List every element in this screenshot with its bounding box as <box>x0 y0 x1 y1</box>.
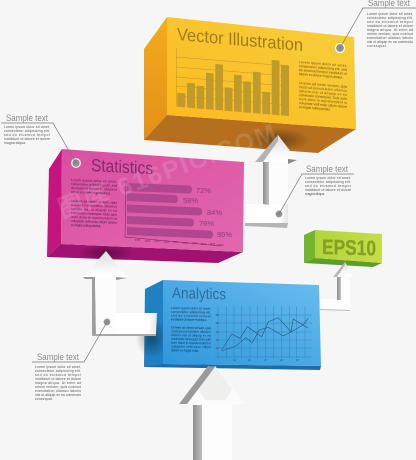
bar chart: horizontal percentages: 90% <box>210 242 216 246</box>
text block: blue box: commodo consequat. Duis aute <box>171 337 211 342</box>
callout: middle right sample text: Lorem ipsum dolor sit amet, <box>305 176 351 180</box>
callout: left sample text: Sample text <box>6 113 48 123</box>
line chart: blue box: 10 <box>216 346 219 350</box>
line chart: blue box: 40 <box>216 321 219 325</box>
bar chart: horizontal percentages: 80% <box>201 242 207 246</box>
callout: top right sample text: consectetur adipisicing elit, <box>367 16 413 20</box>
callout: top right sample text: incididunt ut labore et dolore <box>367 24 413 28</box>
text block: orange box: irure dolor in reprehenderit in <box>299 97 347 105</box>
text block: orange box: Ut enim ad minim veniam, quis <box>299 81 347 89</box>
heading: Statistics: Statistics <box>91 155 153 178</box>
text block: blue box: incididunt ut labore et dolore. <box>171 317 207 322</box>
text block: orange box: nostrud exercitation ullamco <box>299 85 347 93</box>
line chart: blue box: 40 <box>280 358 283 362</box>
callout: lower left sample text: sed do eiusmod tempor <box>35 373 82 377</box>
text block: blue box: Ut enim ad minim veniam, quis <box>171 326 211 330</box>
panel: green box EPS10 <box>304 230 382 267</box>
panel: orange box Vector Illustration <box>144 17 356 153</box>
panel: pink box Statistics <box>47 149 244 263</box>
line chart: blue box <box>215 306 312 362</box>
bar chart: horizontal percentages: 70% <box>192 241 198 245</box>
callout: lower left sample text: consequat. <box>35 397 53 401</box>
text block: pink box: consectetur adipisicing elit, sed <box>71 182 117 188</box>
bar chart: horizontal percentages: 40% <box>164 240 170 244</box>
callout: top right sample text: minim veniam, quis nostrud <box>367 32 413 36</box>
bar chart: orange <box>176 48 289 116</box>
callout: left sample text: sed do eiusmod tempor <box>4 133 51 137</box>
text block: orange box: eu fugiat nulla pariatur. <box>299 105 331 112</box>
callout: middle right sample text: incididunt ut labore et dolore <box>305 188 351 192</box>
bar chart: horizontal percentages: 95% <box>217 230 232 239</box>
text block: orange box: do eiusmod tempor incididunt ut <box>299 68 347 76</box>
callout: left sample text: incididunt ut labore et dolore <box>4 137 50 141</box>
text block: blue box: nostrud exercitation ullamco <box>171 329 211 334</box>
bar chart: horizontal percentages <box>125 180 232 247</box>
text block: pink box: eu fugiat nulla pariatur. <box>71 223 101 228</box>
callout: middle right sample text: magna aliqua. <box>305 192 325 196</box>
callout: left sample text <box>1 113 76 163</box>
callout: top right sample text: Lorem ipsum dolor sit amet, <box>367 12 413 16</box>
text block: pink box: laboris nisi ut aliquip ex ea <box>71 207 117 213</box>
text block: blue box: voluptate velit esse cillum <box>171 345 211 349</box>
callout: lower left sample text: incididunt ut labore et dolore <box>35 377 81 381</box>
callout: middle right sample text: Sample text <box>306 164 348 174</box>
line chart: blue box: 50 <box>216 313 219 317</box>
panel: blue box Analytics <box>136 280 321 370</box>
heading: EPS10: EPS10 <box>322 236 376 260</box>
callout: middle right sample text: sed do eiusmod tempor <box>305 184 352 188</box>
text block: pink box: Ut enim ad minim veniam, quis <box>71 199 117 205</box>
text block: orange box: voluptate velit esse cillum dolore <box>299 101 347 109</box>
callout: top right sample text: magna aliqua. Ut enim ad <box>367 28 413 32</box>
bar chart: horizontal percentages: 50% <box>173 240 179 244</box>
arrow: orange to pink <box>245 135 297 228</box>
bar chart: horizontal percentages: 72% <box>196 186 211 195</box>
text block: pink box: do eiusmod tempor incididunt ut <box>71 186 117 192</box>
callout: top right sample text: consequat. <box>367 44 387 48</box>
text block: pink box: nostrud exercitation ullamco <box>71 203 117 209</box>
callout dot: orange box <box>336 44 344 52</box>
arrow: bottom up to blue <box>179 366 245 460</box>
callout: top right sample text: sed do eiusmod tempor <box>367 20 414 24</box>
callout: middle right sample text <box>279 164 354 214</box>
text block: orange box: labore et dolore magna aliqua. <box>299 72 343 80</box>
bar chart: horizontal percentages: 10% <box>135 238 141 242</box>
bar chart: horizontal percentages: 58% <box>183 196 198 205</box>
watermark: 图库 616PIC.COM <box>54 118 282 224</box>
callout: lower left sample text: minim veniam, quis nostrud <box>35 385 81 389</box>
line chart: blue box: 10 <box>233 358 236 362</box>
bar chart: horizontal percentages: 30% <box>154 239 160 243</box>
text block: orange box: consectetur adipisicing elit, sed <box>299 64 347 72</box>
callout: lower left sample text: consectetur adipisicing elit, <box>35 369 81 373</box>
text block: pink box <box>71 178 117 229</box>
text block: orange box: laboris nisi ut aliquip ex ea <box>299 89 347 97</box>
line chart: blue box: 50 <box>296 358 299 362</box>
callout: lower left sample text: Sample text <box>37 352 79 362</box>
bar chart: horizontal percentages: 76% <box>199 219 214 228</box>
callout dot: arrow <box>275 210 283 218</box>
heading: Analytics: Analytics <box>172 285 226 303</box>
callout: left sample text: magna aliqua. <box>4 141 26 145</box>
text block: blue box: sed do eiusmod tempor <box>171 314 212 318</box>
arrow: blue to green <box>320 262 353 311</box>
line chart: blue box: 20 <box>216 338 219 342</box>
callout: lower left sample text: magna aliqua. Ut enim ad <box>35 381 81 385</box>
callout: lower left sample text <box>32 322 107 401</box>
callout: lower left sample text: Lorem ipsum dolor sit amet, <box>35 365 81 369</box>
bar chart: horizontal percentages: 60% <box>183 241 189 245</box>
text block: blue box: Lorem ipsum dolor sit amet, <box>171 306 211 311</box>
text block: pink box: voluptate velit esse cillum dolore <box>71 219 117 225</box>
callout: lower left sample text: nisi ut aliquip ex ea commodo <box>35 393 81 397</box>
text block: pink box: Lorem ipsum dolor sit amet, <box>71 178 117 184</box>
callout: top right sample text <box>340 0 416 48</box>
line chart: blue box: 20 <box>248 358 251 362</box>
arrow: pink to blue <box>83 251 157 336</box>
bar chart: horizontal percentages: 84% <box>207 208 222 217</box>
callout: left sample text: Lorem ipsum dolor sit amet, <box>4 125 50 129</box>
line chart: blue box: 30 <box>216 330 219 334</box>
text block: blue box: irure dolor in reprehenderit in <box>171 341 211 345</box>
callout: lower left sample text: exercitation ullamco laboris <box>35 389 81 393</box>
text block: orange box: Lorem ipsum dolor sit amet, <box>299 60 347 68</box>
text block: pink box: labore et dolore magna aliqua. <box>71 190 111 196</box>
text block: orange box <box>299 60 347 113</box>
text block: blue box <box>171 306 212 353</box>
text block: orange box: commodo consequat. Duis aute <box>299 93 347 101</box>
line chart: blue box: 30 <box>264 358 267 362</box>
text block: pink box: commodo consequat. Duis aute <box>71 211 117 217</box>
bar chart: horizontal percentages: 20% <box>145 239 151 243</box>
text block: blue box: dolore eu fugiat nulla. <box>171 348 199 353</box>
heading: Vector Illustration: Vector Illustration <box>177 24 303 55</box>
callout dot: pink box <box>72 159 80 167</box>
callout: top right sample text: nisi ut aliquip ex ea commodo <box>367 40 413 44</box>
text block: blue box: consectetur adipisicing elit, <box>171 310 211 314</box>
bar chart: horizontal percentages: 100% <box>217 243 224 247</box>
callout dot: arrow <box>103 318 111 326</box>
callout: left sample text: consectetur adipisicing elit, <box>4 129 50 133</box>
callout: middle right sample text: consectetur adipisicing elit, <box>305 180 351 184</box>
text block: pink box: irure dolor in reprehenderit in <box>71 215 117 221</box>
text block: blue box: laboris nisi ut aliquip ex ea <box>171 333 211 338</box>
callout: top right sample text: exercitation ullamco laboris <box>367 36 413 40</box>
